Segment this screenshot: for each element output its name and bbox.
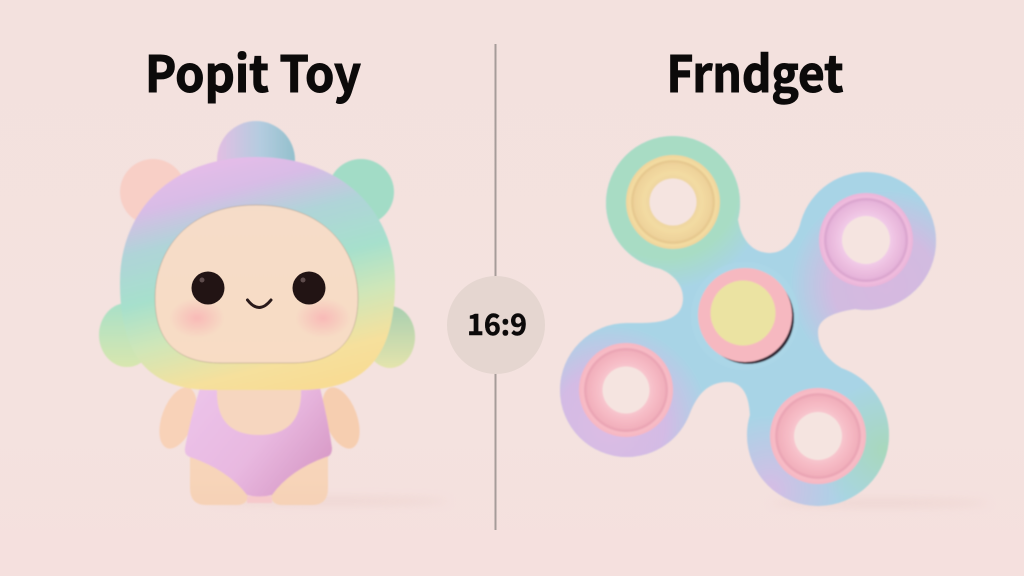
ground shadows (210, 498, 990, 506)
eyes and mouth (192, 272, 326, 308)
swimsuit (185, 388, 332, 496)
ears (99, 121, 415, 368)
title: Frndget: Frndget (666, 35, 844, 107)
illustration: Popit toy character (99, 121, 415, 505)
badge: 16:9: 16:9 (467, 302, 527, 344)
hood (120, 157, 395, 390)
spinner body (560, 135, 936, 507)
arms (152, 382, 367, 454)
chest (217, 388, 301, 435)
rings (579, 155, 913, 484)
legs (190, 440, 328, 505)
cheeks (169, 298, 351, 338)
face (155, 205, 358, 363)
divider line (494, 44, 496, 530)
centre hub (691, 262, 799, 370)
illustration: Frndget fidget spinner (560, 135, 936, 507)
title: Popit Toy: Popit Toy (145, 35, 361, 107)
badge: 16:9 (447, 276, 545, 374)
